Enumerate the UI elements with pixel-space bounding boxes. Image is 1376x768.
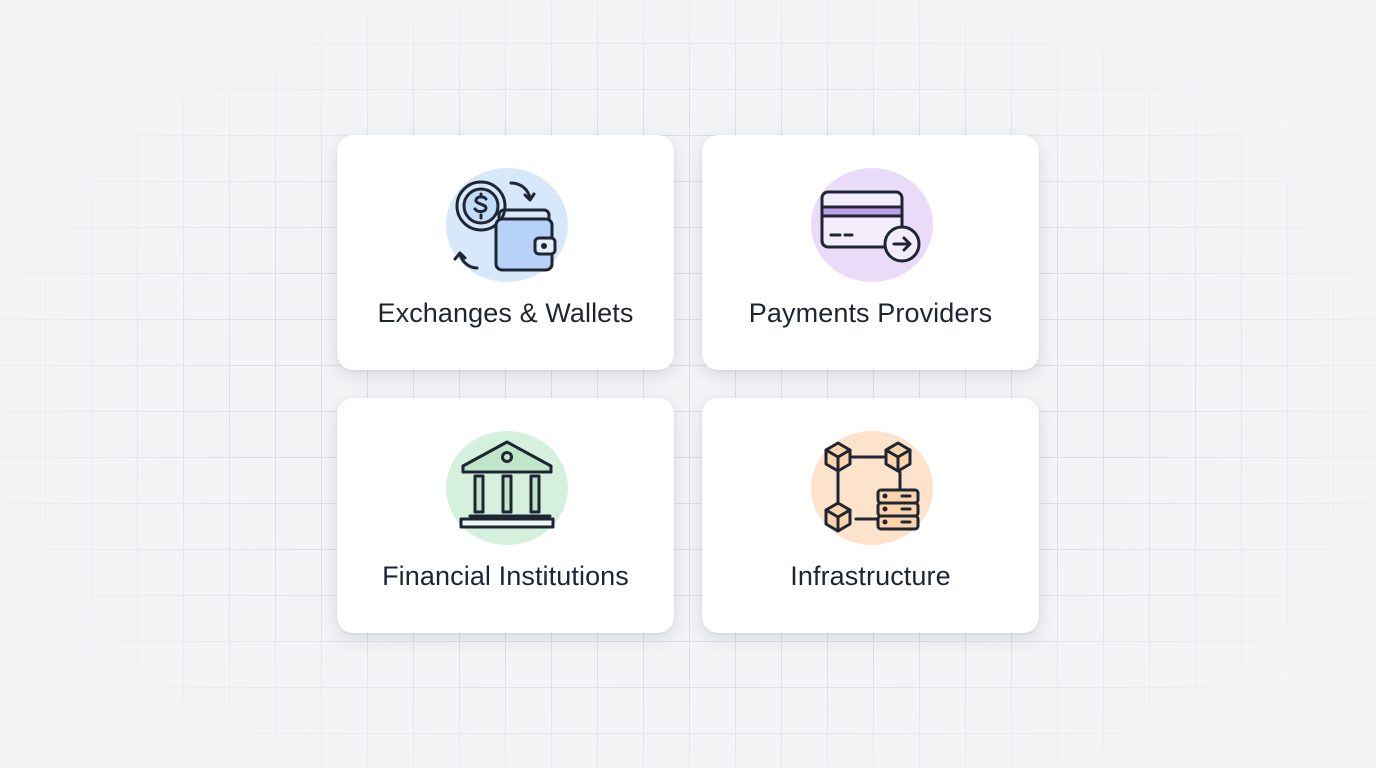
icon: credit card with arrow xyxy=(811,168,933,282)
card: Payments Providers xyxy=(702,135,1039,370)
card: Exchanges & Wallets xyxy=(337,135,674,370)
label: Payments Providers xyxy=(749,298,992,328)
icon: blocks and server xyxy=(811,431,933,545)
icon: coin and wallet xyxy=(446,168,568,282)
label: Infrastructure xyxy=(790,561,951,591)
label: Exchanges & Wallets xyxy=(377,298,634,328)
card: Infrastructure xyxy=(702,398,1039,633)
icon: bank building xyxy=(446,431,568,545)
card: Financial Institutions xyxy=(337,398,674,633)
label: Financial Institutions xyxy=(382,561,629,591)
